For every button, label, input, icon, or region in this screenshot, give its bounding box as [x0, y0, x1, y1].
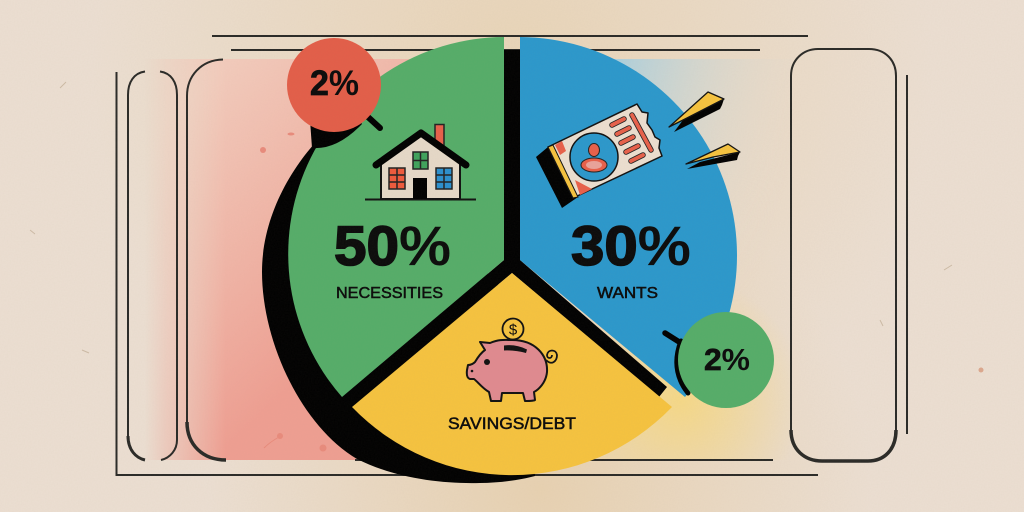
icon: house	[365, 124, 476, 200]
callout: red 2%	[287, 38, 381, 132]
pie slice: wants	[520, 37, 737, 397]
icon: ticket	[536, 104, 662, 208]
heading: 50%: 50%	[334, 214, 451, 277]
callout: red 2%: 2%	[310, 64, 359, 103]
paper specks	[30, 82, 984, 452]
heading: 30%: 30%	[571, 214, 691, 277]
frame outlines	[116, 36, 907, 475]
pie slice: necessities	[288, 37, 504, 397]
label: necessities: NECESSITIES	[336, 285, 443, 302]
label: savings and debt: SAVINGS/DEBT	[448, 415, 576, 433]
icon: lightning bolts	[669, 92, 740, 169]
panel: blue and yellow wash behind wants	[520, 59, 792, 460]
pie shadow crescent	[262, 115, 535, 483]
label: wants: WANTS	[597, 285, 658, 302]
icon: piggy bank: $	[509, 322, 518, 338]
panel: red wash behind necessities	[145, 59, 410, 460]
callout: green 2%: 2%	[704, 342, 750, 377]
red callout connector	[310, 90, 380, 148]
callout: green 2%	[678, 312, 774, 408]
pie dividers	[342, 50, 667, 407]
icon: piggy bank	[467, 318, 557, 401]
pie slice: savings and debt	[352, 273, 672, 475]
green callout connector	[665, 333, 688, 393]
